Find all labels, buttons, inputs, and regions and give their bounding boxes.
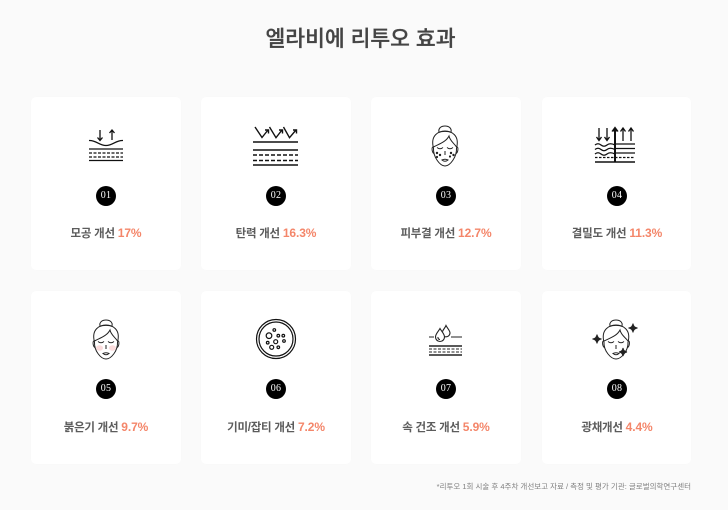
panel: 02 elasticity: [201, 97, 351, 270]
panel: 04 density: [542, 97, 691, 270]
label: elasticity improvement: 탄력 개선 16.3%: [236, 226, 316, 240]
number badge 06: 06: [271, 383, 281, 394]
icon: face with red cheeks: [92, 320, 120, 360]
label: redness improvement: 붉은기 개선 9.7%: [64, 420, 148, 434]
label: skin texture improvement: 피부결 개선 12.7%: [400, 226, 492, 240]
icon: density layers with arrows: [594, 126, 635, 163]
number badge 02: [266, 186, 286, 206]
panel: 08 radiance: [542, 291, 691, 464]
number badge 03: 03: [441, 190, 451, 201]
panel: 07 inner dryness: [371, 291, 521, 464]
panel: 03 skin texture: [371, 97, 521, 270]
number badge 02: 02: [271, 190, 281, 201]
number badge 04: 04: [612, 190, 622, 201]
number badge 01: 01: [101, 190, 111, 201]
label: radiance improvement: 광채개선 4.4%: [581, 420, 653, 434]
number badge 03: [436, 186, 456, 206]
number badge 06: [266, 379, 286, 399]
icon: elastic skin layers: [253, 126, 298, 166]
icon: skin layers with pore arrows: [88, 129, 123, 162]
panel: 05 redness: [31, 291, 181, 464]
icon: face with blemishes: [432, 126, 458, 166]
number badge 01: [96, 186, 116, 206]
number badge 07: 07: [441, 383, 451, 394]
number badge 05: [96, 379, 116, 399]
number badge 04: [607, 186, 627, 206]
label: pore improvement: 모공 개선 17%: [71, 226, 141, 240]
footnote: *리투오 1회 시술 후 4주차 개선보고 자료 / 측정 및 평가 기관: 글로벌의학연구센터: [437, 482, 691, 491]
number badge 08: [607, 379, 627, 399]
number badge 05: 05: [101, 383, 111, 394]
title: 엘라비에 리투오 효과: [266, 27, 455, 51]
icon: round skin spots: [256, 318, 296, 360]
label: spots improvement: 기미/잡티 개선 7.2%: [227, 420, 325, 434]
label: density improvement: 결밀도 개선 11.3%: [572, 226, 662, 240]
number badge 07: [436, 379, 456, 399]
number badge 08: 08: [612, 383, 622, 394]
icon: face with sparkles: [592, 320, 638, 360]
panel: 01 pore: [31, 97, 181, 270]
label: inner dryness improvement: 속 건조 개선 5.9%: [402, 420, 490, 434]
icon: water drops on skin: [429, 324, 462, 356]
panel: 06 spots: [201, 291, 351, 464]
